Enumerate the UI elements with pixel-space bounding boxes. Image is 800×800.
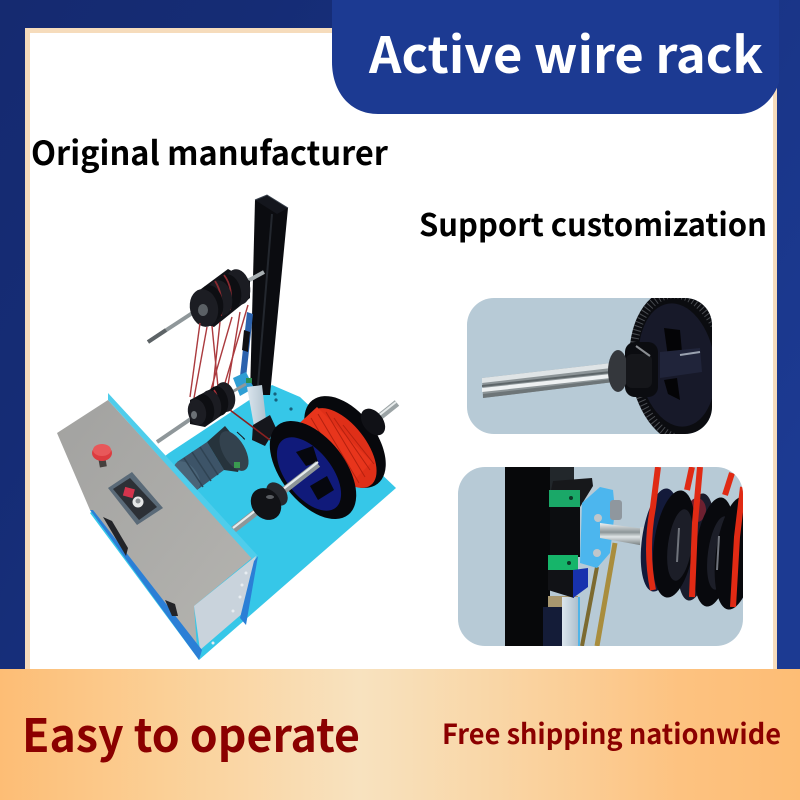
upper shaft bbox=[148, 272, 264, 342]
control box bbox=[57, 393, 258, 660]
red wire coil bbox=[273, 396, 390, 517]
red rope bbox=[649, 467, 743, 607]
aluminium rail bbox=[543, 596, 580, 646]
rear spool knob bbox=[356, 404, 390, 440]
machine illustration bbox=[57, 195, 402, 660]
slogan: free shipping nationwide: Free shipping nationwide bbox=[442, 713, 781, 753]
knob bbox=[608, 342, 658, 397]
rear spool flange bbox=[288, 381, 402, 503]
pulley shaft bbox=[600, 523, 644, 548]
small wire to spool bbox=[230, 410, 270, 440]
emergency stop button bbox=[92, 444, 112, 467]
lower pulley group bbox=[185, 380, 238, 427]
main shaft end bbox=[372, 402, 397, 423]
shaft bbox=[482, 364, 610, 398]
heading: support customization: Support customization bbox=[419, 200, 767, 245]
drive belts bbox=[582, 543, 615, 646]
lower shaft bbox=[157, 384, 246, 442]
front spool flange bbox=[253, 405, 373, 535]
linear block bbox=[548, 478, 593, 598]
white content panel with peach frame bbox=[25, 28, 777, 678]
speed controller panel bbox=[108, 472, 163, 525]
slogan: easy to operate: Easy to operate bbox=[22, 700, 360, 766]
base plate bbox=[90, 385, 396, 660]
upper pulley group bbox=[186, 267, 253, 329]
spool flange bbox=[630, 298, 712, 434]
motor bbox=[169, 426, 255, 496]
box side cut-outs bbox=[103, 517, 128, 556]
wire loops between pulleys bbox=[190, 305, 248, 398]
detail photo: spool knob and shaft bbox=[467, 298, 712, 434]
black column bbox=[505, 467, 550, 646]
title banner bbox=[332, 0, 779, 114]
title banner: Active wire rack bbox=[368, 16, 763, 88]
end face screws bbox=[212, 572, 248, 644]
cyan bracket bbox=[580, 487, 615, 568]
detail photo: linear guide and pulleys bbox=[458, 467, 764, 646]
main shaft front bbox=[233, 462, 318, 530]
bottom band bbox=[0, 669, 800, 800]
front spool knob bbox=[245, 478, 292, 526]
pulley discs bbox=[640, 488, 743, 610]
bracket bolts and clamp bbox=[593, 500, 622, 557]
heading: original manufacturer: Original manufacturer bbox=[31, 127, 389, 175]
vertical column bbox=[233, 195, 288, 446]
